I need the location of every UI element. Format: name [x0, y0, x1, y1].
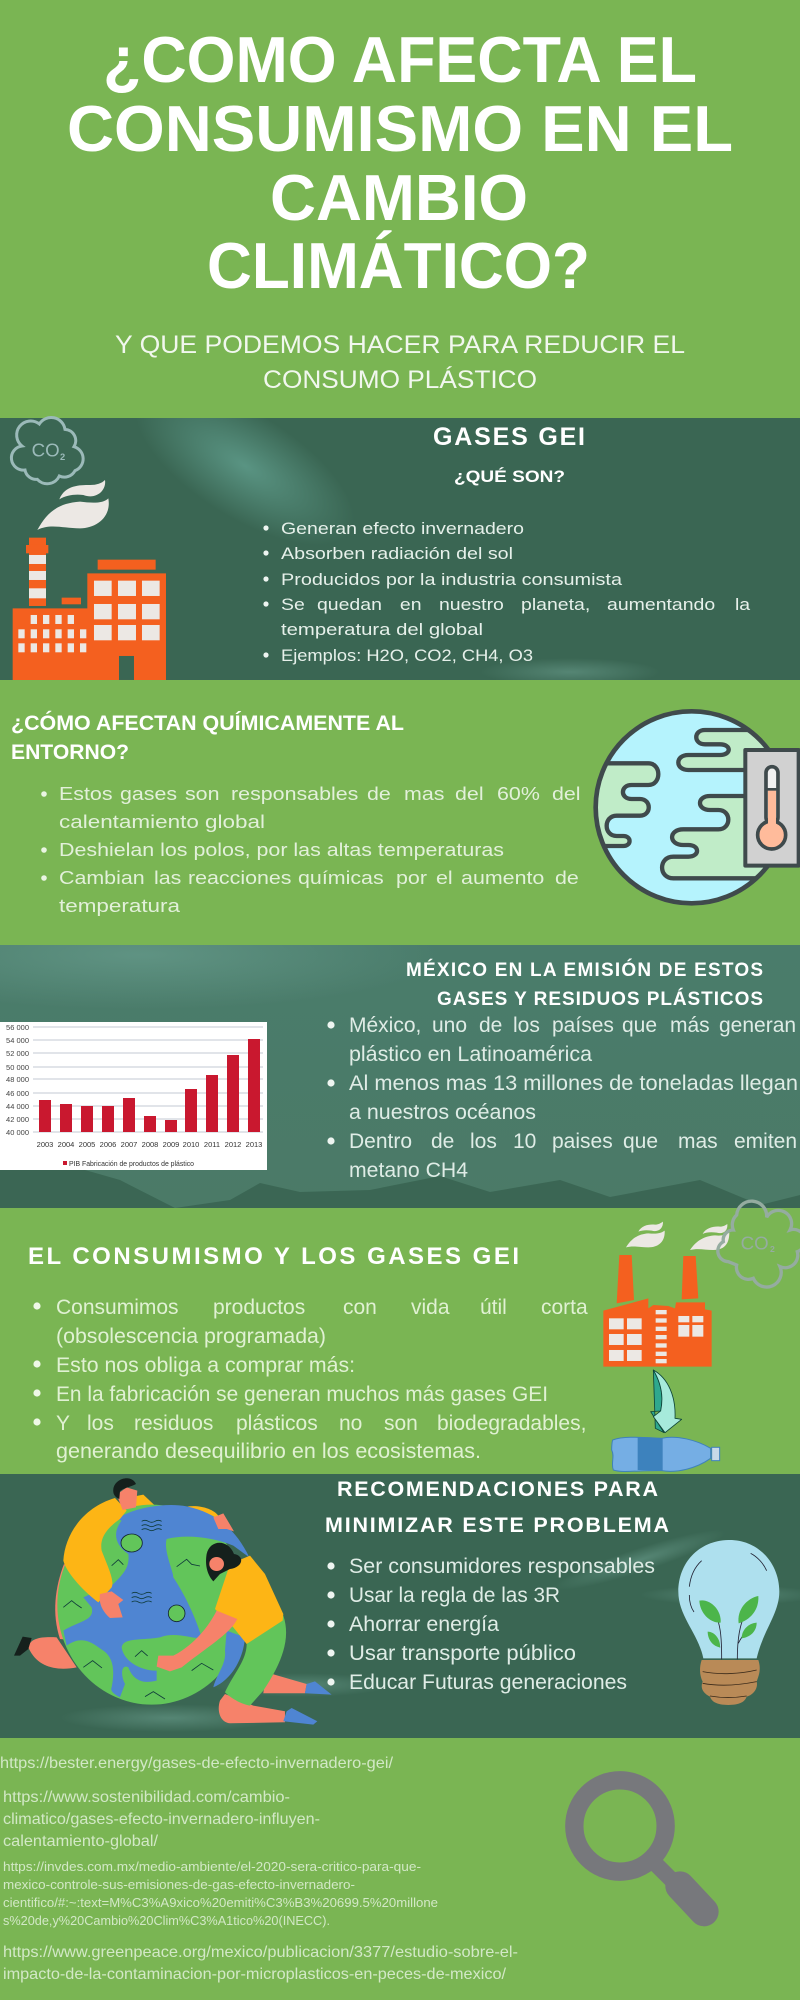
list: chemical effects: químicas [298, 868, 384, 889]
bar chart: plastics GDP: 2008 [142, 1140, 158, 1149]
list: recommendations: Ser consumidores responsables [349, 1555, 655, 1578]
list: Mexico facts: los [470, 1130, 497, 1153]
list: chemical effects: son [185, 784, 220, 805]
illustration: people hugging the Earth [14, 1478, 332, 1725]
list: recommendations: Ahorrar energía [349, 1613, 499, 1636]
list: what GEI gases are [263, 520, 751, 665]
list: Mexico facts: uno [432, 1014, 467, 1037]
panel background with mountains [0, 945, 800, 1208]
bar chart: plastics GDP: 2010 [183, 1140, 199, 1149]
list: recommendations [327, 1555, 655, 1694]
heading: Mexico [406, 959, 763, 1010]
list: consumerism: Y [56, 1412, 70, 1435]
woman legs [219, 1672, 307, 1723]
list: Mexico facts: generan [719, 1014, 796, 1037]
list: Mexico facts: Dentro [349, 1130, 412, 1153]
heading: que son: ¿QUÉ SON? [454, 467, 565, 486]
woman shirt [215, 1556, 283, 1644]
list: consumerism: En la fabricación se generan muchos más gases GEI [56, 1383, 548, 1406]
list: chemical effects: Deshielan los polos, por las altas temperaturas [59, 839, 504, 860]
list: consumerism: son [384, 1412, 418, 1435]
list: chemical effects: temperatura [59, 895, 181, 916]
bar chart: plastics GDP: 2013 [246, 1140, 262, 1149]
panel: recomendaciones [0, 1474, 800, 1738]
arrow [651, 1370, 682, 1433]
list: what GEI gases are: aumentando [607, 595, 715, 614]
list: consumerism: plásticos [236, 1412, 318, 1435]
bar chart: plastics GDP: 46 000 [6, 1089, 29, 1098]
footer: source links: s%20de,y%20Cambio%20Clim%C3%A1tico%20(INECC). [3, 1913, 330, 1928]
list: what GEI gases are: Absorben radiación del sol [281, 545, 513, 563]
man head [113, 1478, 137, 1510]
list: Mexico facts: más [670, 1014, 710, 1037]
list: Mexico facts: paises [552, 1130, 613, 1153]
factory building [13, 538, 166, 680]
list: chemical effects: Estos [59, 784, 113, 805]
subtitle: Y QUE PODEMOS HACER PARA REDUCIR EL [115, 331, 685, 359]
list: Mexico facts: a nuestros océanos [349, 1101, 536, 1124]
woman arm [157, 1611, 237, 1671]
bar chart: plastics GDP: 2005 [79, 1140, 95, 1149]
bar chart: plastics GDP: 2003 [37, 1140, 53, 1149]
list: Mexico facts: 10 [513, 1130, 536, 1153]
list: Mexico facts: Al menos mas 13 millones de toneladas llegan [349, 1072, 798, 1095]
list: chemical effects: responsables [231, 784, 358, 805]
list: consumerism: vida [411, 1296, 450, 1319]
list: what GEI gases are: nuestro [439, 595, 504, 614]
list: what GEI gases are: Producidos por la industria consumista [281, 571, 623, 589]
Earth [57, 1505, 249, 1705]
list: what GEI gases are: en [400, 595, 422, 614]
heading: recomendaciones [325, 1477, 669, 1537]
list: consumerism: generando desequilibrio en los ecosistemas. [56, 1440, 481, 1463]
list: Mexico facts: que [623, 1130, 658, 1153]
woman shoes [283, 1681, 332, 1725]
list: recommendations: Usar la regla de las 3R [349, 1584, 560, 1607]
icon: light bulb with plant [678, 1540, 779, 1705]
footer: source links: mexico-controle-sus-emisiones-de-gas-efecto-invernadero- [3, 1877, 355, 1892]
list: what GEI gases are: planeta, [521, 595, 590, 614]
footer: source links: calentamiento-global/ [3, 1833, 159, 1850]
list: chemical effects: reacciones [188, 868, 291, 889]
icon: factory with chimney [13, 480, 166, 680]
list: Mexico facts: México, [349, 1014, 421, 1037]
bar chart: plastics GDP: 42 000 [6, 1115, 29, 1124]
bar chart: plastics GDP: PIB Fabricación de productos de plástico [69, 1159, 194, 1168]
list: recommendations: Usar transporte público [349, 1642, 576, 1665]
footer: source links: https://www.sostenibilidad.com/cambio- [3, 1789, 290, 1806]
list: consumerism: Esto nos obliga a comprar más: [56, 1354, 355, 1377]
bar chart: plastics GDP: 2006 [100, 1140, 116, 1149]
title [67, 23, 733, 302]
icon: CO2 cloud [11, 417, 83, 484]
list: chemical effects: de [367, 784, 391, 805]
icon: CO2 cloud: CO [32, 440, 60, 461]
list: chemical effects: 60% [497, 784, 540, 805]
list: consumerism: no [339, 1412, 362, 1435]
smoke [626, 1222, 729, 1250]
list: Mexico facts: de [431, 1130, 454, 1153]
title: CLIMÁTICO? [207, 229, 590, 302]
list: what GEI gases are: Se [281, 595, 305, 614]
heading: recomendaciones: RECOMENDACIONES PARA [337, 1477, 658, 1501]
list: chemical effects: de [555, 868, 579, 889]
bar chart: plastics GDP: 2004 [58, 1140, 74, 1149]
footer: source links [0, 1755, 518, 1983]
heading: como afectan: ENTORNO? [11, 741, 129, 764]
list: what GEI gases are: temperatura del global [281, 621, 483, 639]
list: chemical effects: Cambian [59, 868, 145, 889]
list: Mexico facts: los [513, 1014, 540, 1037]
thermometer [745, 750, 799, 866]
list: Mexico facts: de [479, 1014, 502, 1037]
list: consumerism: con [343, 1296, 377, 1319]
man hands [100, 1513, 234, 1618]
list: what GEI gases are: la [735, 595, 751, 614]
subtitle [115, 331, 685, 394]
factory [603, 1255, 712, 1367]
heading: recomendaciones: MINIMIZAR ESTE PROBLEMA [325, 1513, 669, 1537]
list: Mexico facts: metano CH4 [349, 1159, 468, 1182]
list: what GEI gases are: Ejemplos: H2O, CO2, CH4, O3 [281, 647, 533, 665]
list: chemical effects: las [154, 868, 181, 889]
list: chemical effects: del [455, 784, 484, 805]
CO2 cloud [718, 1201, 800, 1287]
smoke [37, 480, 109, 530]
bar chart: plastics GDP: 44 000 [6, 1102, 29, 1111]
footer: source links: https://www.greenpeace.org/mexico/publicacion/3377/estudio-sobre-el- [3, 1944, 518, 1961]
heading: Mexico: MÉXICO EN LA EMISIÓN DE ESTOS [406, 959, 763, 981]
bar chart: plastics GDP: 50 000 [6, 1063, 29, 1072]
woman head [206, 1543, 241, 1581]
icon: magnifying glass [574, 1780, 704, 1912]
list: consumerism: corta [541, 1296, 588, 1319]
list: chemical effects: mas [404, 784, 444, 805]
list: Mexico facts: mas [678, 1130, 718, 1153]
CO2 cloud: 2 [770, 1244, 775, 1254]
woman trousers [225, 1616, 286, 1706]
list: chemical effects: gases [120, 784, 177, 805]
man far shoulder [187, 1506, 218, 1521]
list: chemical effects: aumento [461, 868, 544, 889]
plastic bottle [612, 1437, 720, 1471]
bar chart: plastics GDP: 2011 [204, 1140, 220, 1149]
bar chart: plastics GDP: 2009 [163, 1140, 179, 1149]
bar chart: plastics GDP: 48 000 [6, 1075, 29, 1084]
list: Mexico facts: emiten [734, 1130, 797, 1153]
list: chemical effects: el [436, 868, 453, 889]
footer: source links: impacto-de-la-contaminacion-por-microplasticos-en-peces-de-mexico/ [3, 1966, 507, 1983]
man legs [28, 1564, 77, 1669]
heading: Mexico: GASES Y RESIDUOS PLÁSTICOS [437, 988, 763, 1010]
panel: consumismo y gases GEI [28, 1201, 800, 1471]
heading: gases GEI: GASES GEI [433, 423, 585, 451]
list: Mexico facts: plástico en Latinoamérica [349, 1043, 592, 1066]
footer: source links: https://invdes.com.mx/medio-ambiente/el-2020-sera-critico-para-que- [3, 1859, 421, 1874]
panel: como afectan quimicamente [11, 711, 799, 916]
list: Mexico facts: que [622, 1014, 657, 1037]
title: CAMBIO [270, 161, 528, 234]
list: recommendations: Educar Futuras generaciones [349, 1671, 627, 1694]
list: what GEI gases are: Generan efecto invernadero [281, 520, 524, 538]
panel background [0, 418, 800, 680]
panel background [0, 1474, 800, 1738]
list: consumerism: productos [213, 1296, 305, 1319]
bar chart: plastics GDP: 2012 [225, 1140, 241, 1149]
list: consumerism: (obsolescencia programada) [56, 1325, 326, 1348]
panel: gases GEI [0, 416, 800, 680]
list: chemical effects: calentamiento global [59, 811, 265, 832]
list: what GEI gases are: quedan [317, 595, 382, 614]
bar chart: plastics GDP: 52 000 [6, 1049, 29, 1058]
heading: como afectan: ¿CÓMO AFECTAN QUÍMICAMENTE AL [11, 711, 404, 735]
footer: source links: climatico/gases-efecto-invernadero-influyen- [3, 1811, 320, 1828]
list: consumerism: Consumimos [56, 1296, 179, 1319]
list: chemical effects: del [552, 784, 581, 805]
heading: como afectan [11, 711, 404, 764]
title: ¿COMO AFECTA EL [103, 23, 697, 96]
list: chemical effects [41, 784, 581, 916]
icon: factory, arrow and plastic bottle [603, 1201, 800, 1471]
list: consumerism: útil [480, 1296, 507, 1319]
list: Mexico facts [327, 1014, 798, 1182]
list: Mexico facts: países [552, 1014, 614, 1037]
man sweater and arm in front of the Earth [63, 1498, 127, 1602]
list: chemical effects: por [396, 868, 427, 889]
list: consumerism: residuos [134, 1412, 213, 1435]
heading: consumismo: EL CONSUMISMO Y LOS GASES GEI [28, 1243, 519, 1270]
footer: source links: https://bester.energy/gases-de-efecto-invernadero-gei/ [0, 1755, 394, 1772]
list: consumerism [33, 1296, 588, 1463]
list: consumerism: biodegradables, [437, 1412, 586, 1435]
subtitle: CONSUMO PLÁSTICO [263, 365, 537, 394]
bar chart: plastics GDP: 2007 [121, 1140, 137, 1149]
icon: globe with thermometer [590, 711, 799, 903]
bar chart: plastics GDP: 54 000 [6, 1036, 29, 1045]
title: CONSUMISMO EN EL [67, 92, 733, 165]
bar chart: plastics GDP [0, 1022, 267, 1170]
footer: source links: cientifico/#:~:text=M%C3%A9xico%20emiti%C3%B3%20699.5%20millone [3, 1895, 438, 1910]
panel: Mexico emissions [0, 945, 800, 1208]
bar chart: plastics GDP: 56 000 [6, 1023, 29, 1032]
CO2 cloud: CO [741, 1232, 769, 1253]
bar chart: plastics GDP: 40 000 [6, 1128, 29, 1137]
icon: CO2 cloud: 2 [60, 452, 65, 462]
list: consumerism: los [87, 1412, 114, 1435]
